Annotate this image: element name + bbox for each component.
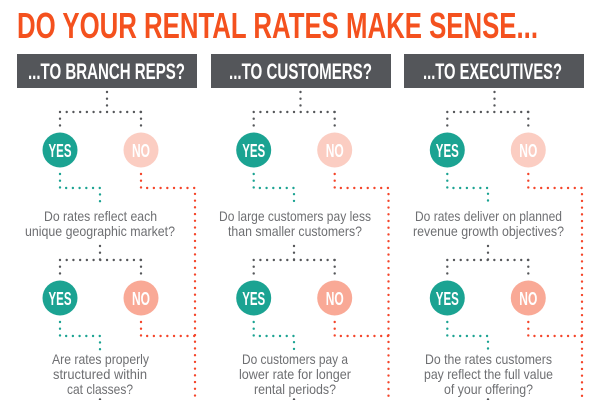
heading bar: [211, 54, 391, 88]
yes badge: YES: [242, 140, 265, 161]
connector: no to side line: [335, 174, 388, 400]
yes badge: YES: [436, 288, 459, 309]
question 2: Do the rates customers: [425, 351, 552, 367]
connector: yes to question: [254, 322, 294, 350]
no badge: [317, 280, 352, 316]
connector: no to side line: [141, 174, 195, 400]
yes badge: [42, 280, 78, 316]
yes badge: YES: [48, 288, 72, 309]
no badge: NO: [132, 140, 150, 161]
no badge: NO: [519, 288, 537, 309]
no badge: [317, 132, 352, 168]
question 2: pay reflect the full value: [424, 366, 553, 382]
question 1: Do rates deliver on planned: [415, 208, 562, 224]
connector: question to choices: [254, 246, 335, 274]
question 2: cat classes?: [67, 381, 133, 397]
question 1: Do large customers pay less: [219, 208, 371, 224]
question 2: [239, 351, 351, 397]
connector: question to choices: [447, 246, 528, 274]
connector: header to choices: [254, 92, 335, 126]
yes badge: YES: [436, 140, 459, 161]
connector: question to choices: [60, 246, 141, 274]
panel: to branch reps: [17, 54, 197, 400]
question 2: lower rate for longer: [239, 366, 351, 382]
connector: no to side line: [528, 174, 582, 400]
yes badge: [42, 132, 78, 168]
connector: next step dot: [293, 398, 295, 400]
yes badge: [236, 280, 271, 316]
question 1: unique geographic market?: [25, 223, 175, 239]
heading bar: ...TO BRANCH REPS?: [28, 59, 185, 84]
connector: no to side line: [528, 322, 582, 336]
connector: yes to question: [447, 174, 488, 202]
connector: next step dot: [99, 398, 101, 400]
yes badge: [236, 132, 271, 168]
question 2: rental periods?: [254, 381, 336, 397]
question 2: Are rates properly: [52, 351, 149, 367]
no badge: [124, 132, 158, 168]
yes badge: [430, 132, 465, 168]
connector: no to side line: [141, 322, 195, 336]
yes badge: [430, 280, 465, 316]
yes badge: YES: [242, 288, 265, 309]
question 2: [52, 351, 149, 397]
yes badge: YES: [48, 140, 72, 161]
question 2: [424, 351, 553, 397]
connector: yes to question: [60, 322, 100, 350]
connector: next step dot: [487, 398, 489, 400]
no badge: [511, 280, 546, 316]
question 2: of your offering?: [444, 381, 533, 397]
question 2: Do customers pay a: [242, 351, 348, 367]
panel: to customers: [211, 54, 391, 400]
question 1: than smaller customers?: [228, 223, 362, 239]
connector: header to choices: [60, 92, 141, 126]
question 1: Do rates reflect each: [44, 208, 157, 224]
panel: to executives: [404, 54, 584, 400]
connector: yes to question: [447, 322, 488, 350]
question 1: [413, 208, 564, 239]
no badge: NO: [519, 140, 537, 161]
heading bar: [17, 54, 197, 88]
no badge: [511, 132, 546, 168]
question 1: revenue growth objectives?: [413, 223, 564, 239]
heading bar: [404, 54, 584, 88]
question 1: [25, 208, 175, 239]
question 2: structured within: [53, 366, 147, 382]
connector: no to side line: [335, 322, 388, 336]
heading bar: ...TO CUSTOMERS?: [229, 59, 372, 84]
no badge: NO: [326, 140, 344, 161]
connector: yes to question: [60, 174, 100, 202]
no badge: NO: [132, 288, 150, 309]
connector: yes to question: [254, 174, 294, 202]
no badge: NO: [326, 288, 344, 309]
no badge: [124, 280, 158, 316]
connector: header to choices: [447, 92, 528, 126]
question 1: [219, 208, 371, 239]
